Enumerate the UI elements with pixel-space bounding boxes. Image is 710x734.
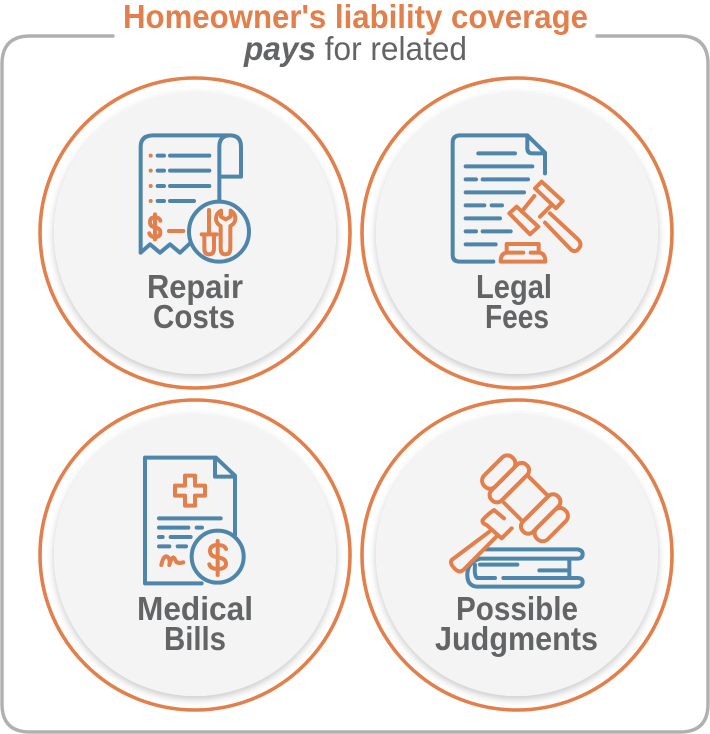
panel: legal fees: [362, 78, 672, 388]
icon: gavel on book: [451, 449, 583, 587]
panel: possible judgments: [362, 400, 672, 710]
label: possible judgments: Judgments: [435, 620, 598, 657]
label: possible judgments: [435, 590, 598, 657]
icon: receipt with tools: [141, 135, 249, 262]
label: medical bills: Medical: [137, 590, 253, 627]
label: repair costs: [147, 268, 243, 335]
label: possible judgments: Possible: [456, 590, 578, 627]
label: repair costs: Repair: [147, 268, 243, 305]
title: pays for related: [243, 30, 467, 67]
label: legal fees: Fees: [485, 298, 549, 335]
label: medical bills: [137, 590, 253, 657]
title: [123, 0, 588, 67]
label: legal fees: Legal: [476, 268, 552, 305]
icon: medical bill: [145, 458, 244, 583]
label: legal fees: [476, 268, 552, 335]
panel: medical bills: [40, 400, 350, 710]
icon: document with gavel: [453, 135, 580, 262]
label: repair costs: Costs: [153, 298, 235, 335]
panel: repair costs: [40, 78, 350, 388]
label: medical bills: Bills: [164, 620, 226, 657]
